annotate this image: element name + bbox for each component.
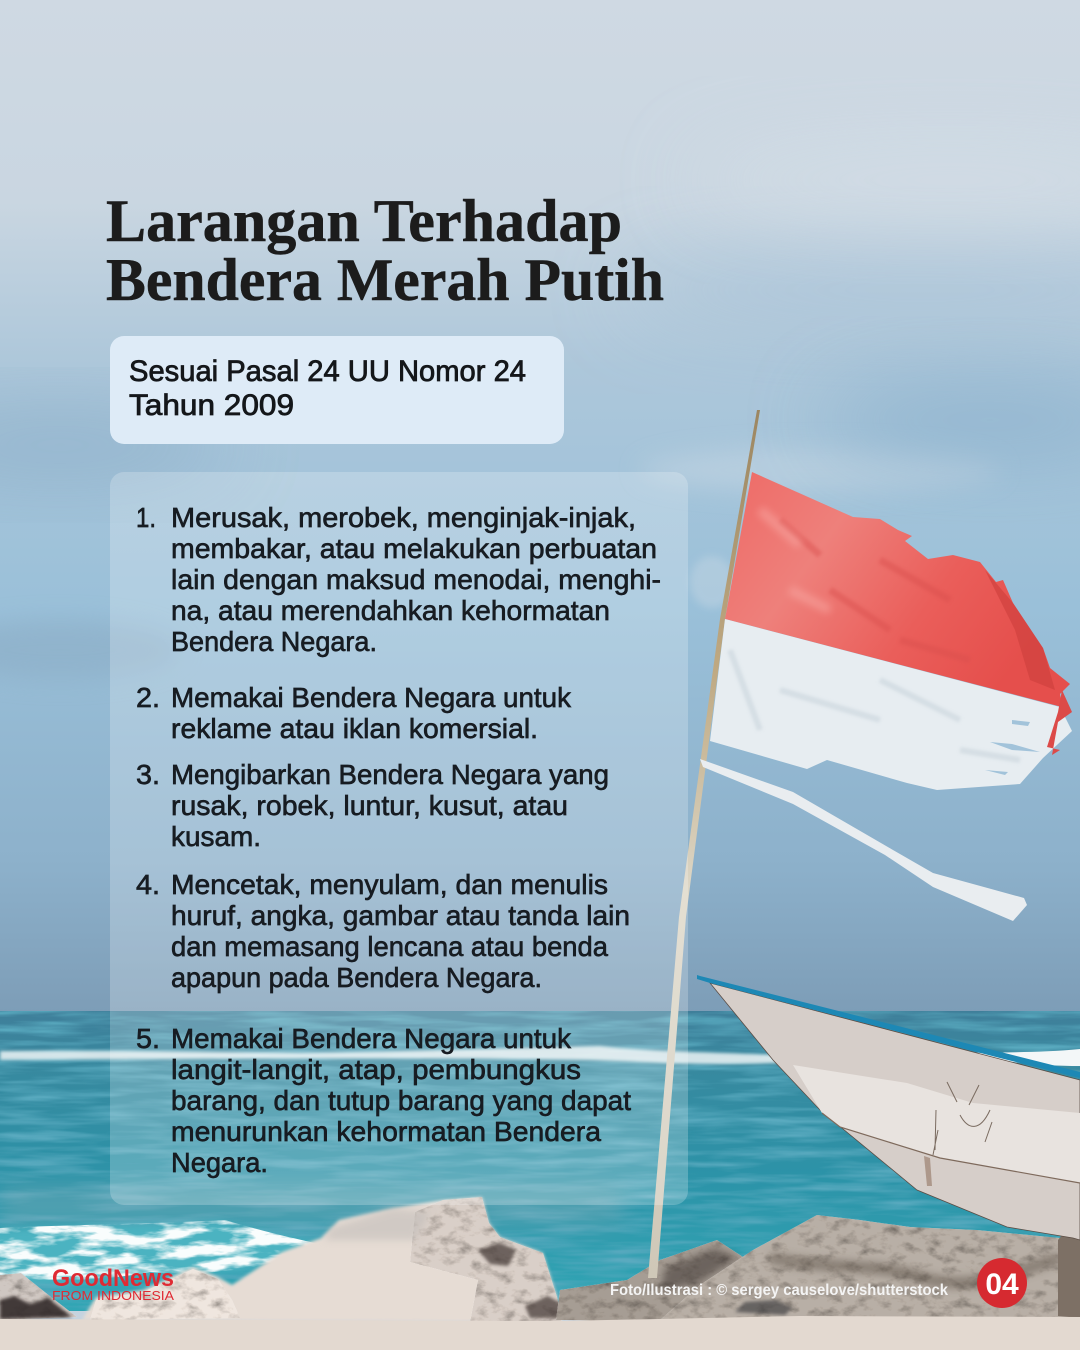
logo: GoodNews from Indonesia: FROM INDONESIA — [52, 1289, 175, 1303]
indonesian flag — [700, 472, 1072, 921]
background: sea — [0, 1011, 1080, 1311]
sand beach — [0, 1316, 1080, 1350]
flag torn fringe — [1047, 690, 1072, 755]
flag fold shadow — [985, 570, 1055, 690]
title — [106, 188, 664, 313]
translucent list panel — [110, 472, 688, 1205]
title: Larangan Terhadap — [106, 188, 622, 254]
item 1 — [136, 502, 661, 657]
item 1: lain dengan maksud menodai, menghi- — [171, 564, 661, 595]
rough rock side — [410, 1197, 562, 1322]
breaking wave — [0, 1046, 778, 1064]
left dark rock — [0, 1273, 77, 1320]
list of prohibitions — [136, 502, 661, 1178]
item 4: Mencetak, menyulam, dan menulis — [171, 869, 608, 900]
item 3: kusam. — [171, 821, 261, 852]
item 5: menurunkan kehormatan Bendera — [171, 1116, 601, 1147]
boat — [697, 975, 1080, 1240]
item 1: na, atau merendahkan kehormatan — [171, 595, 610, 626]
rust stain — [924, 1156, 932, 1186]
flag red stripe — [725, 472, 1070, 707]
sand mound — [82, 1197, 562, 1322]
flag streamer — [700, 759, 1027, 921]
item 4: dan memasang lencana atau benda — [171, 931, 608, 962]
item 5: Memakai Bendera Negara untuk — [171, 1023, 572, 1054]
item 2: reklame atau iklan komersial. — [171, 713, 538, 744]
foam — [0, 1220, 325, 1284]
far wave right — [965, 1049, 1080, 1066]
background: sky — [0, 0, 1080, 1012]
flag torn holes — [985, 720, 1040, 775]
item 4 — [136, 869, 630, 993]
item 1: 1. — [136, 502, 156, 533]
legal basis callout: Sesuai Pasal 24 UU Nomor 24 — [129, 355, 526, 388]
item 1: membakar, atau melakukan perbuatan — [171, 533, 657, 564]
legal basis callout: Tahun 2009 — [129, 389, 294, 422]
item 1: Bendera Negara. — [171, 626, 377, 657]
item 5: barang, dan tutup barang yang dapat — [171, 1085, 631, 1116]
item 3: 3. — [136, 759, 160, 790]
white stripe creases — [730, 650, 1020, 760]
item 3: Mengibarkan Bendera Negara yang — [171, 759, 609, 790]
blue rim — [697, 975, 1080, 1078]
item 4: huruf, angka, gambar atau tanda lain — [171, 900, 630, 931]
hull seam — [822, 1113, 1080, 1183]
item 3 — [136, 759, 609, 852]
item 4: 4. — [136, 869, 160, 900]
item 3: rusak, robek, luntur, kusut, atau — [171, 790, 568, 821]
boat hull — [710, 983, 1080, 1240]
item 5: 5. — [136, 1023, 160, 1054]
photo credit: Foto/Ilustrasi : © sergey causelove/shutterstock — [610, 1282, 948, 1299]
item 1: Merusak, merobek, menginjak-injak, — [171, 502, 636, 533]
item 2: 2. — [136, 682, 160, 713]
rocks at lower right — [556, 1213, 1080, 1322]
item 4: apapun pada Bendera Negara. — [171, 962, 542, 993]
item 2 — [136, 682, 572, 744]
page number badge — [977, 1258, 1027, 1308]
page number badge: 04 — [985, 1268, 1019, 1301]
item 2: Memakai Bendera Negara untuk — [171, 682, 572, 713]
flag creases — [780, 520, 970, 660]
legal basis callout — [110, 336, 564, 444]
item 5: langit-langit, atap, pembungkus — [171, 1054, 581, 1085]
logo: GoodNews from Indonesia: GoodNews — [52, 1265, 174, 1292]
rock and sand mound at lower left — [0, 1197, 562, 1322]
sunlit hull band — [793, 1065, 1080, 1183]
logo: GoodNews from Indonesia — [52, 1265, 175, 1303]
flag white stripe — [710, 619, 1072, 790]
item 5: Negara. — [171, 1147, 268, 1178]
item 5 — [136, 1023, 631, 1178]
title: Bendera Merah Putih — [106, 247, 664, 313]
hull scratches — [933, 1082, 992, 1155]
bamboo pole — [648, 410, 760, 1278]
